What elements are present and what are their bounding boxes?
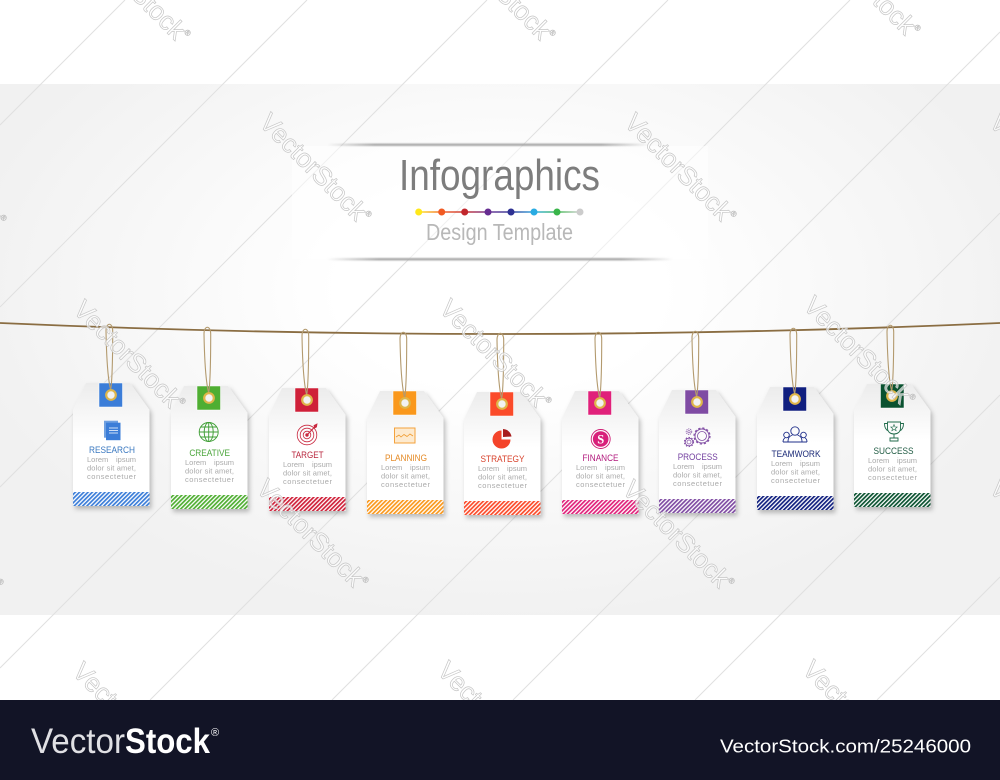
icon: coin xyxy=(591,430,610,448)
tag: process xyxy=(659,331,736,513)
body text xyxy=(381,463,430,489)
tag: finance xyxy=(562,332,638,514)
body text: Lorem xyxy=(673,462,694,471)
tag: planning xyxy=(367,332,444,514)
body text: dolor sit amet, xyxy=(868,464,917,474)
body text: ipsum xyxy=(800,459,820,468)
watermarks: VectorStock xyxy=(619,107,738,226)
body text: Lorem xyxy=(381,463,402,472)
body text: Lorem xyxy=(868,456,889,465)
body text: consectetuer xyxy=(868,473,918,482)
icon: globe xyxy=(199,422,218,442)
watermarks: ® xyxy=(547,28,558,38)
watermarks: ® xyxy=(728,209,739,219)
body text xyxy=(185,458,234,484)
watermarks: VectorStock xyxy=(251,473,370,592)
body text: Lorem xyxy=(283,460,304,469)
watermarks: ® xyxy=(176,758,187,768)
body text: consectetuer xyxy=(771,476,820,485)
body text: ipsum xyxy=(897,456,917,465)
body text: dolor sit amet, xyxy=(185,466,234,476)
label: PROCESS xyxy=(678,452,718,462)
label: CREATIVE xyxy=(189,448,230,458)
logo xyxy=(31,722,219,761)
body text xyxy=(576,463,626,489)
label: STRATEGY xyxy=(480,454,524,464)
body text xyxy=(87,455,136,481)
body text: consectetuer xyxy=(87,472,136,481)
body text: dolor sit amet, xyxy=(673,470,722,480)
tag: research xyxy=(73,324,150,506)
watermarks: ® xyxy=(726,576,737,586)
rope xyxy=(0,323,1000,334)
body text: ipsum xyxy=(410,463,430,472)
icon: people xyxy=(783,427,807,442)
body text: Lorem xyxy=(576,463,597,472)
footer bar xyxy=(0,700,1000,780)
body text: ipsum xyxy=(116,455,136,464)
watermarks: ® xyxy=(177,396,188,406)
watermarks: ® xyxy=(912,23,923,33)
body text: Lorem xyxy=(185,458,206,467)
tag: target xyxy=(269,329,346,511)
body text: Lorem xyxy=(771,459,792,468)
logo: ® xyxy=(211,727,219,739)
watermarks: VectorStock xyxy=(432,655,551,774)
body text xyxy=(771,459,820,485)
watermarks: ® xyxy=(541,757,552,767)
watermarks: ® xyxy=(906,756,917,766)
body text: dolor sit amet, xyxy=(283,468,332,478)
icon: documents xyxy=(104,421,120,440)
body text: dolor sit amet, xyxy=(87,464,136,472)
body text: ipsum xyxy=(312,460,332,469)
watermarks: ® xyxy=(360,575,371,585)
subtitle: Design Template xyxy=(426,219,573,245)
label: RESEARCH xyxy=(89,445,135,455)
body text: consectetuer xyxy=(478,481,528,490)
body text: consectetuer xyxy=(283,477,332,486)
body text: dolor sit amet, xyxy=(478,472,527,482)
dotted colour line xyxy=(415,208,584,216)
icon: coin: S xyxy=(597,432,604,446)
body text: ipsum xyxy=(605,463,625,472)
icon: gears xyxy=(684,428,710,447)
body text xyxy=(673,462,722,488)
label: TEAMWORK xyxy=(772,449,821,459)
watermarks: ® xyxy=(363,209,374,219)
tag: creative xyxy=(171,327,248,509)
label: SUCCESS xyxy=(874,446,914,456)
body text: ipsum xyxy=(507,464,527,473)
label: FINANCE xyxy=(582,453,618,463)
logo: Vector xyxy=(31,722,125,761)
body text: ipsum xyxy=(702,462,722,471)
body text xyxy=(478,464,528,490)
icon: pie chart xyxy=(492,429,512,448)
icon: target xyxy=(297,424,317,445)
watermarks: VectorStock xyxy=(67,656,186,775)
watermarks: VectorStock xyxy=(434,293,553,412)
body text xyxy=(868,456,918,482)
body text: dolor sit amet, xyxy=(771,468,820,476)
body text: consectetuer xyxy=(381,480,430,489)
watermarks: VectorStock xyxy=(797,654,916,773)
tag: success xyxy=(854,325,930,507)
icon: chart xyxy=(394,428,415,443)
watermarks: ® xyxy=(182,28,193,38)
body text: consectetuer xyxy=(673,479,722,488)
bottom rule xyxy=(327,258,673,260)
body text: Lorem xyxy=(478,464,499,473)
body text: consectetuer xyxy=(576,480,626,489)
body text: ipsum xyxy=(214,458,234,467)
body text: dolor sit amet, xyxy=(576,472,625,480)
label: TARGET xyxy=(292,450,324,460)
top rule xyxy=(327,144,649,146)
title box xyxy=(292,144,708,260)
watermarks: VectorStock xyxy=(68,294,187,413)
watermarks: VectorStock xyxy=(617,474,736,593)
label: PLANNING xyxy=(385,453,427,463)
title: Infographics xyxy=(399,151,600,200)
body text: dolor sit amet, xyxy=(381,472,430,480)
background panel xyxy=(0,84,1000,615)
body text: consectetuer xyxy=(185,475,234,484)
tag: teamwork xyxy=(757,328,834,510)
watermarks: ® xyxy=(543,395,554,405)
body text: Lorem xyxy=(87,455,108,464)
watermarks: VectorStock xyxy=(254,107,373,226)
image id: VectorStock.com/25246000 xyxy=(720,736,971,756)
tag: strategy xyxy=(464,333,540,515)
logo: Stock xyxy=(125,722,210,761)
body text xyxy=(283,460,332,486)
watermarks: ® xyxy=(907,392,918,402)
watermarks: VectorStock xyxy=(798,290,917,409)
icon: trophy xyxy=(884,422,904,441)
